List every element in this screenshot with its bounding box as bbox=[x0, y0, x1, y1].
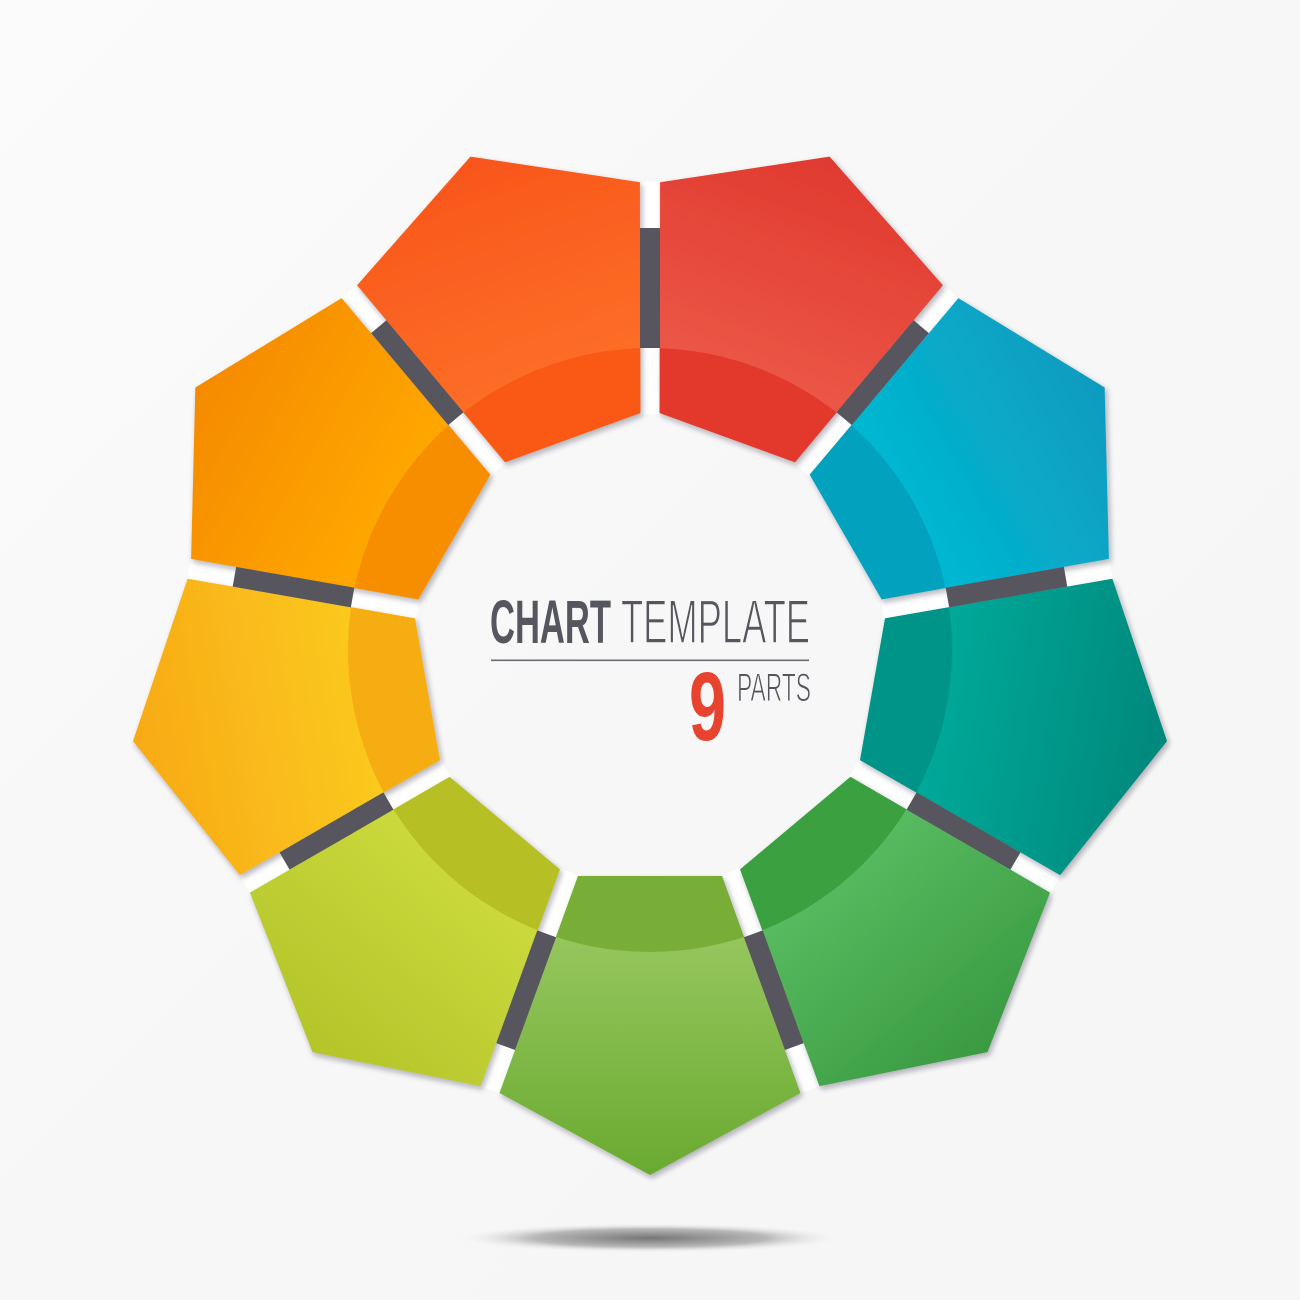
label: PARTS: PARTS bbox=[737, 666, 811, 710]
connector bars between segments bbox=[233, 228, 1067, 1050]
infographic: polygonal chart template with 9 parts bbox=[132, 156, 1172, 1251]
segment 3: teal bbox=[859, 578, 1172, 880]
segment 2: blue bbox=[810, 298, 1114, 606]
segment 6: lime bbox=[250, 776, 564, 1092]
white gaps between segments bbox=[187, 182, 1113, 1094]
segment 7: yellow bbox=[132, 578, 445, 880]
heading word: CHART: CHART bbox=[490, 588, 611, 656]
segment 9: red-orange bbox=[357, 156, 646, 468]
heading word: TEMPLATE: TEMPLATE bbox=[621, 588, 810, 657]
centre title bbox=[490, 588, 811, 761]
segment 1: red bbox=[658, 156, 947, 468]
segment 8: orange bbox=[190, 298, 494, 606]
segment 5: leaf green bbox=[500, 876, 800, 1175]
title rule bbox=[491, 660, 809, 661]
number 9: 9 bbox=[689, 652, 726, 761]
segment 4: green bbox=[740, 776, 1054, 1092]
ground shadow bbox=[455, 1223, 845, 1253]
